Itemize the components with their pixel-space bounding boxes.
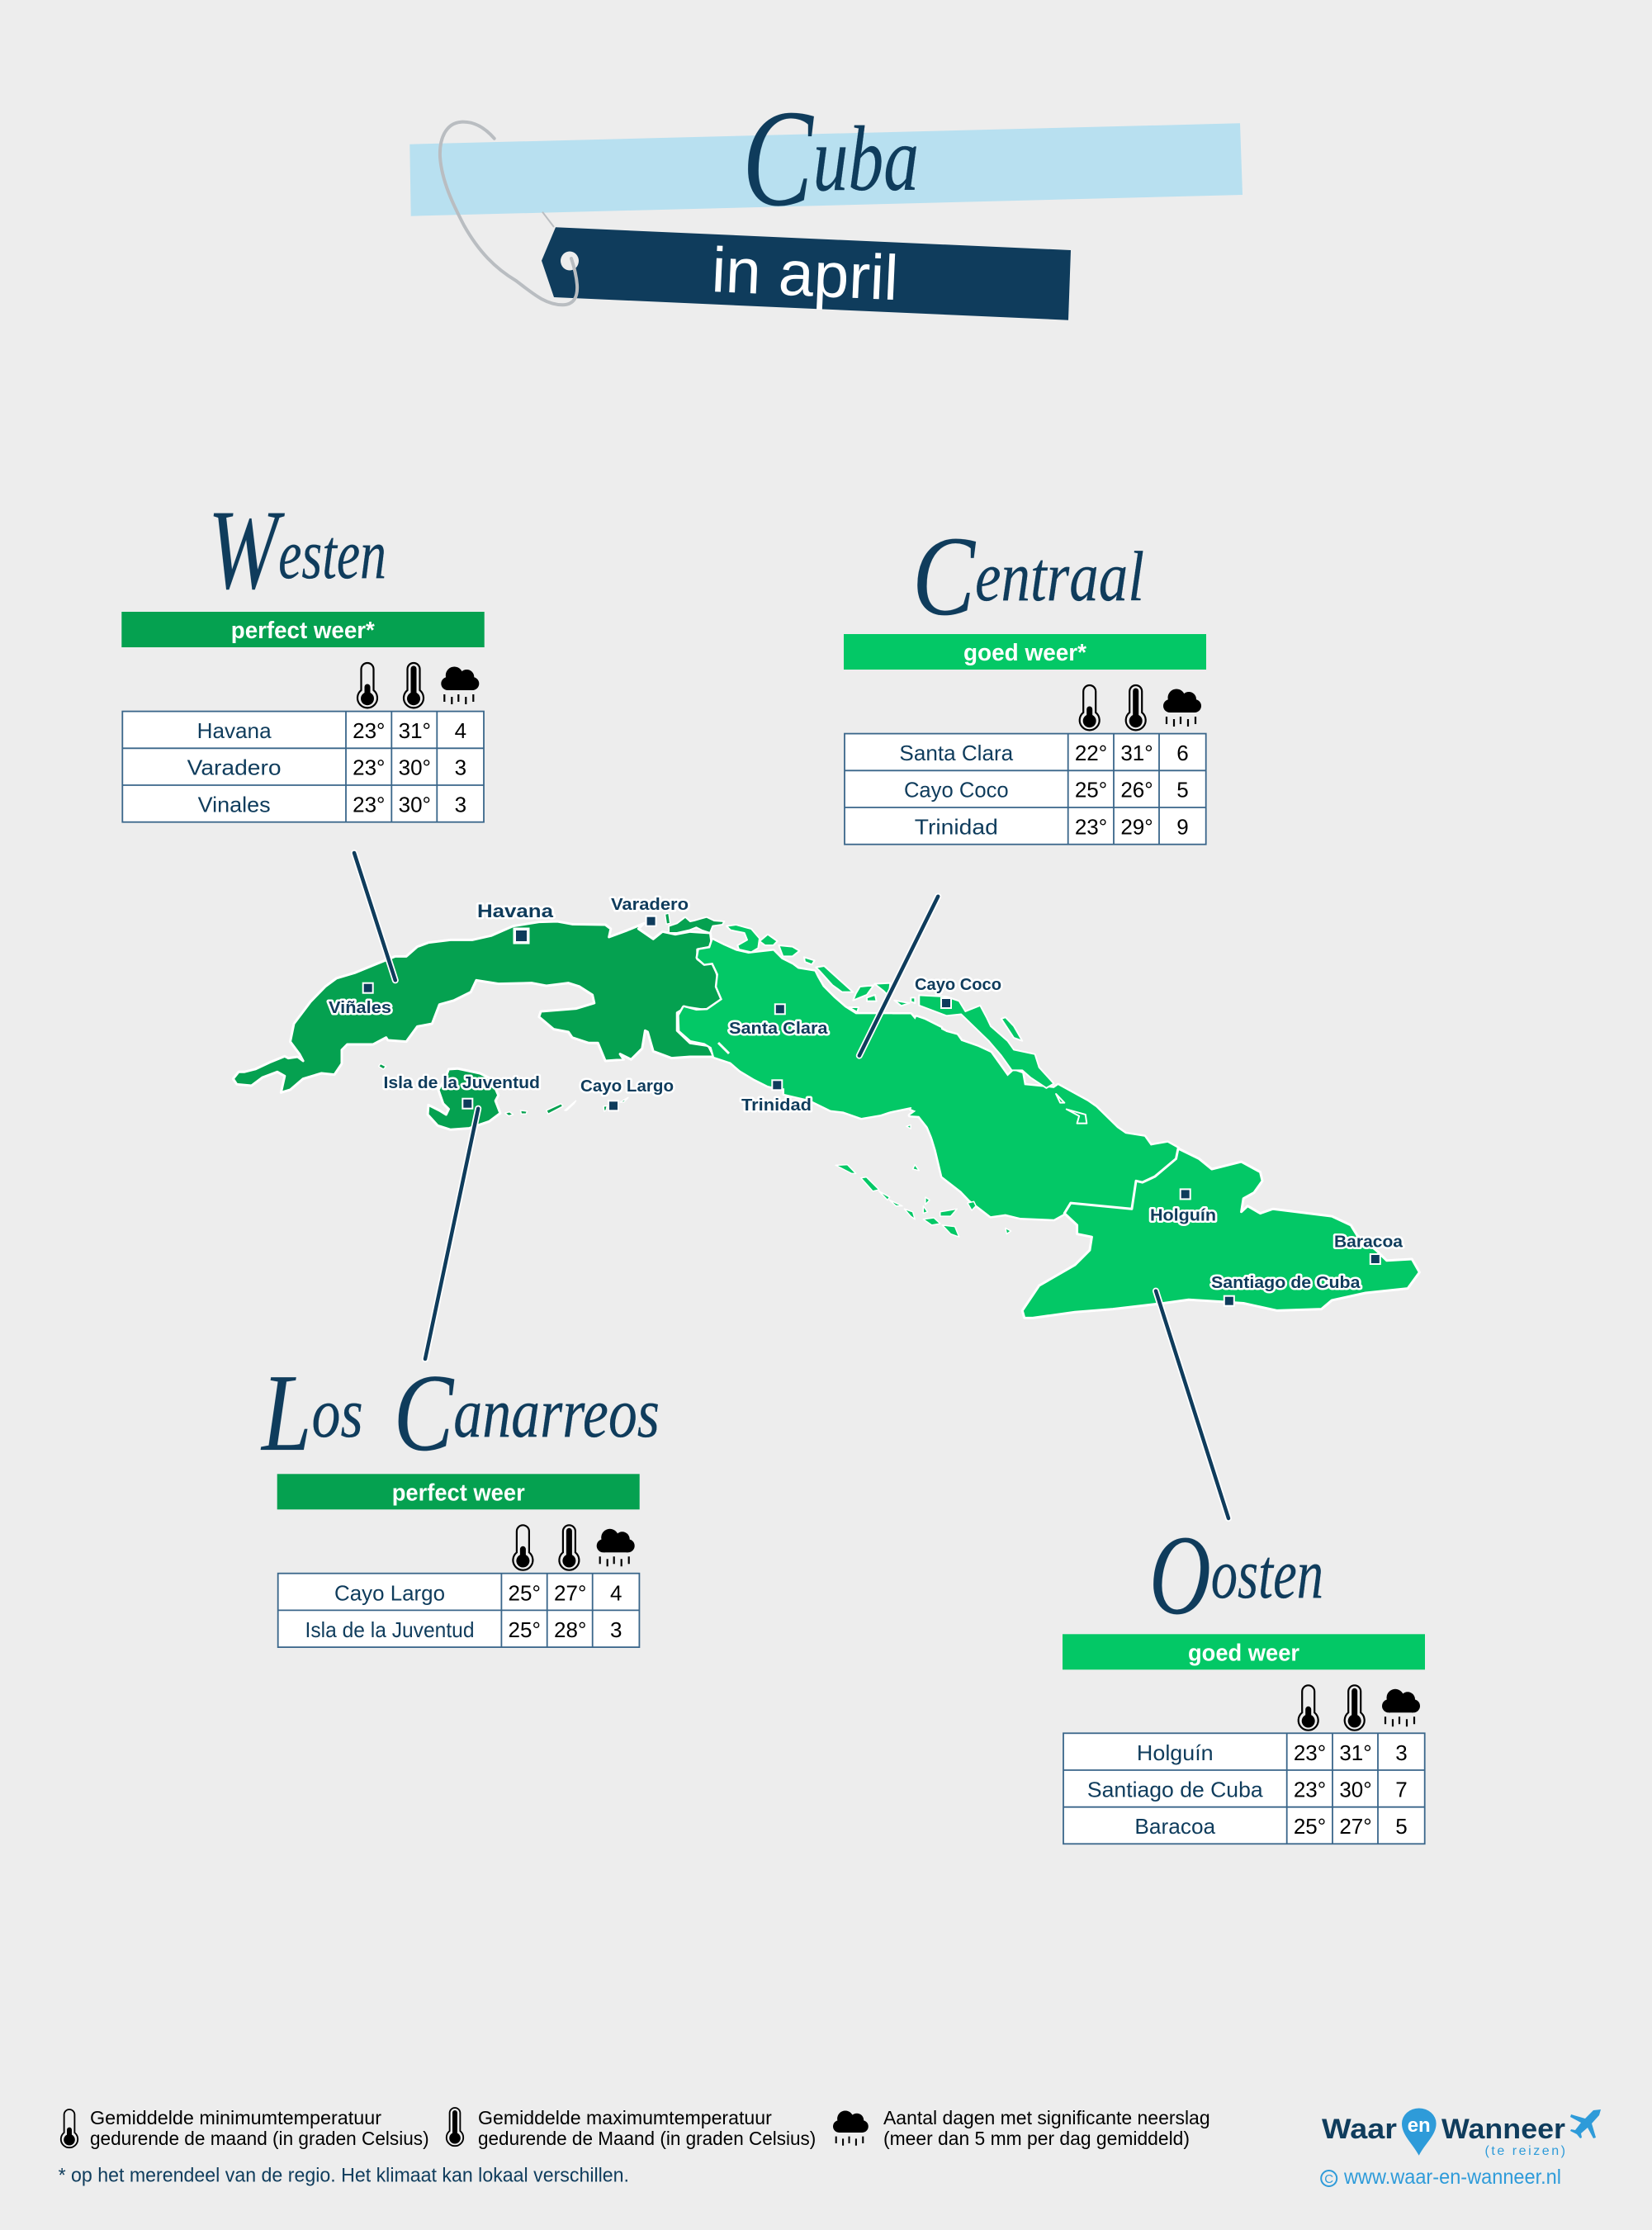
weather table: Centraal: 23° xyxy=(1075,814,1107,839)
legend text: minimum temperature: gedurende de maand (in graden Celsius) xyxy=(90,2128,429,2149)
city labels: Havana xyxy=(477,901,554,921)
tag ring xyxy=(440,122,577,305)
logo: Waar en Wanneer: (te reizen) xyxy=(1484,2144,1565,2158)
city labels: Varadero xyxy=(611,896,689,914)
weather table: Westen: 23° xyxy=(353,792,385,817)
city labels: Cayo Largo xyxy=(580,1077,674,1096)
weather table: Los Canarreos: 25° xyxy=(509,1617,541,1642)
icon: rain days xyxy=(833,2110,869,2146)
weather table: Centraal: 5 xyxy=(1176,778,1189,803)
weather table: Oosten: 30° xyxy=(1339,1778,1372,1802)
weather table: Westen: 31° xyxy=(399,718,431,743)
title: Cuba: C xyxy=(742,82,814,235)
weather table: Westen: 23° xyxy=(353,718,385,743)
city labels xyxy=(329,896,1403,1292)
weather table: Los Canarreos: 4 xyxy=(610,1580,622,1605)
islands north of the west xyxy=(669,917,724,933)
weather table: Centraal: 31° xyxy=(1120,741,1153,765)
weather table: Oosten: 23° xyxy=(1294,1778,1326,1802)
city labels: Santiago de Cuba xyxy=(1211,1274,1361,1292)
logo: Waar en Wanneer: en xyxy=(1408,2114,1431,2137)
weather table: Los Canarreos: perfect weer xyxy=(392,1480,525,1506)
weather table: Los Canarreos: 27° xyxy=(554,1580,586,1605)
legend text: maximum temperature xyxy=(478,2107,816,2149)
city labels: Baracoa xyxy=(1334,1233,1403,1252)
city labels: Cayo Coco xyxy=(915,976,1001,994)
city labels: Viñales xyxy=(329,999,391,1017)
city labels: Holguín xyxy=(1150,1207,1216,1225)
heading: Los Canarreos: C xyxy=(394,1352,455,1474)
legend text: maximum temperature: gedurende de Maand (in graden Celsius) xyxy=(478,2128,816,2149)
weather table: Westen: 4 xyxy=(455,718,466,743)
panel: Westen xyxy=(121,486,485,822)
weather table: Oosten xyxy=(1063,1634,1425,1844)
weather table: Centraal: Santa Clara xyxy=(899,741,1014,765)
legend text: rain days xyxy=(883,2107,1210,2149)
weather table: Westen: 3 xyxy=(455,755,466,780)
map of Cuba xyxy=(233,853,1419,1518)
weather table: Oosten: 7 xyxy=(1395,1778,1408,1802)
weather table: Los Canarreos xyxy=(277,1474,640,1647)
footnote: * op het merendeel van de regio. Het klimaat kan lokaal verschillen. xyxy=(59,2165,629,2187)
logo: Waar en Wanneer: Wanneer xyxy=(1441,2114,1565,2145)
weather table: Westen: 3 xyxy=(455,792,466,817)
weather table: Oosten: 25° xyxy=(1294,1814,1326,1839)
weather table: Westen: Vinales xyxy=(198,792,271,817)
panel: Oosten xyxy=(1063,1512,1425,1844)
weather table: Centraal xyxy=(844,634,1206,845)
heading: Los Canarreos: os xyxy=(312,1373,377,1452)
weather table: Los Canarreos: 25° xyxy=(509,1580,541,1605)
weather table: Oosten: 31° xyxy=(1339,1740,1372,1765)
title: Cuba: uba xyxy=(813,108,919,211)
heading: Westen: W xyxy=(208,486,285,613)
weather table: Oosten: goed weer xyxy=(1188,1640,1299,1666)
weather table: Westen: 30° xyxy=(399,792,431,817)
central northern cays xyxy=(727,925,915,1012)
heading: Centraal: entraal xyxy=(975,537,1144,616)
heading: Westen: esten xyxy=(278,514,386,594)
weather table: Los Canarreos: 3 xyxy=(610,1617,622,1642)
central southern cays xyxy=(835,1124,1011,1237)
logo: Waar en Wanneer: www.waar-en-wanneer.nl xyxy=(1343,2166,1561,2189)
logo: Waar en Wanneer: C xyxy=(1324,2172,1333,2186)
logo: Waar en Wanneer xyxy=(1321,2109,1601,2189)
weather table: Westen: 23° xyxy=(353,755,385,780)
icon: maximum temperature xyxy=(447,2108,463,2146)
region: Centraal xyxy=(679,925,1178,1237)
weather table: Centraal: 22° xyxy=(1075,741,1107,765)
weather table: Oosten: 23° xyxy=(1294,1740,1326,1765)
weather table: Westen: 30° xyxy=(399,755,431,780)
weather table: Centraal: goed weer* xyxy=(963,640,1087,666)
city labels: Santa Clara xyxy=(729,1020,828,1038)
title block xyxy=(409,82,1243,320)
logo: Waar en Wanneer: Waar xyxy=(1322,2114,1397,2145)
weather table: Oosten: Baracoa xyxy=(1134,1814,1216,1839)
weather table: Los Canarreos: Cayo Largo xyxy=(334,1580,445,1605)
weather table: Oosten: 5 xyxy=(1395,1814,1408,1839)
weather table: Westen: Varadero xyxy=(187,755,282,780)
weather table: Centraal: Trinidad xyxy=(915,814,998,839)
weather table: Westen: Havana xyxy=(197,718,272,743)
heading: Oosten: osten xyxy=(1211,1534,1323,1613)
heading: Oosten: O xyxy=(1149,1512,1211,1638)
subtitle tag: in april xyxy=(710,234,900,314)
city markers xyxy=(362,915,1381,1307)
legend text: rain days: Aantal dagen met significante neerslag xyxy=(883,2107,1210,2128)
heading: Centraal: C xyxy=(912,513,977,639)
heading: Los Canarreos: L xyxy=(260,1352,312,1474)
weather table: Oosten: 27° xyxy=(1339,1814,1372,1839)
legend text: rain days: (meer dan 5 mm per dag gemiddeld) xyxy=(883,2128,1190,2149)
legend xyxy=(59,2107,1210,2187)
subtitle tag xyxy=(542,212,1071,320)
weather table: Centraal: 29° xyxy=(1120,814,1153,839)
panel: Centraal xyxy=(844,513,1206,845)
weather table: Oosten: 3 xyxy=(1395,1740,1408,1765)
weather table: Los Canarreos: Isla de la Juventud xyxy=(305,1617,475,1642)
weather table: Westen xyxy=(121,612,485,822)
weather table: Los Canarreos: 28° xyxy=(554,1617,586,1642)
weather table: Centraal: 6 xyxy=(1176,741,1189,765)
region: Oosten xyxy=(1022,1148,1419,1318)
city labels: Trinidad xyxy=(741,1096,812,1115)
weather table: Oosten: Santiago de Cuba xyxy=(1087,1778,1263,1802)
region: Westen xyxy=(233,913,722,1129)
legend text: minimum temperature xyxy=(90,2107,429,2149)
heading: Los Canarreos: anarreos xyxy=(453,1373,660,1452)
icon: minimum temperature xyxy=(61,2109,78,2147)
pointer lines xyxy=(354,853,1228,1518)
city labels: Isla de la Juventud xyxy=(383,1074,540,1092)
title band xyxy=(409,123,1243,216)
weather table: Oosten: Holguín xyxy=(1137,1740,1214,1765)
weather table: Centraal: 9 xyxy=(1176,814,1189,839)
weather table: Centraal: Cayo Coco xyxy=(904,778,1009,803)
panel: Los Canarreos xyxy=(260,1352,660,1647)
legend text: maximum temperature: Gemiddelde maximumtemperatuur xyxy=(478,2107,772,2128)
weather table: Centraal: 26° xyxy=(1120,778,1153,803)
weather table: Centraal: 25° xyxy=(1075,778,1107,803)
legend text: minimum temperature: Gemiddelde minimumtemperatuur xyxy=(90,2107,381,2128)
weather table: Westen: perfect weer* xyxy=(231,618,375,644)
